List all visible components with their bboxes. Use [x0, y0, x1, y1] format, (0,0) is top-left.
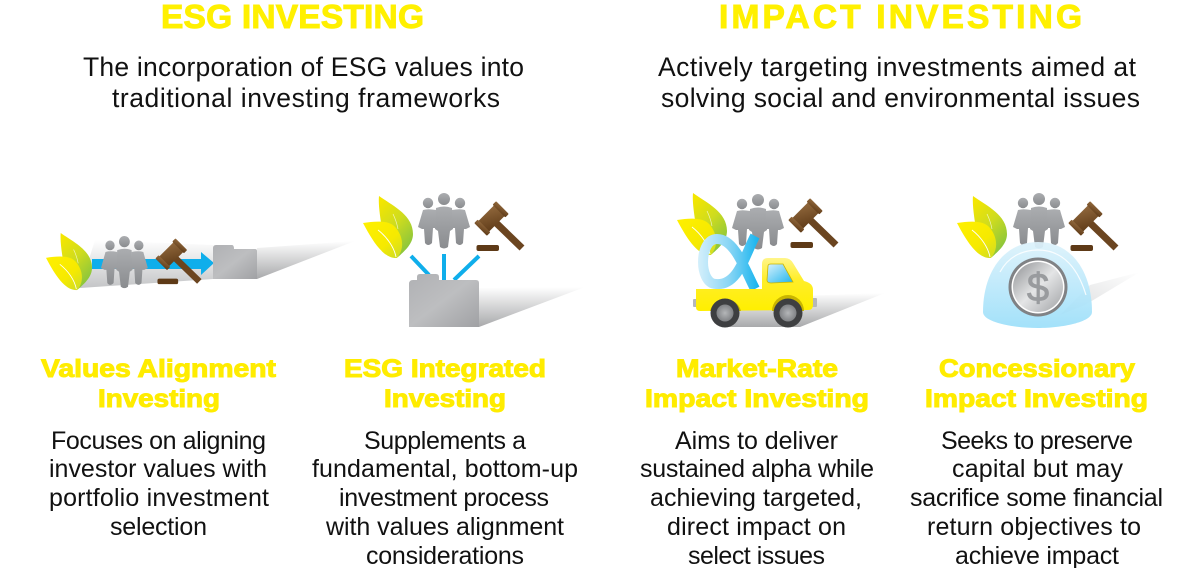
heading: market-rate impact investing	[645, 355, 869, 413]
text: concessionary description: Seeks to preserve	[941, 427, 1133, 455]
heading: concessionary impact investing: Impact Investing	[925, 385, 1148, 413]
panel: ESG integrated investing	[312, 193, 585, 568]
text: values alignment description: portfolio investment	[49, 484, 269, 512]
text: ESG integrated description: Supplements a	[364, 427, 526, 455]
heading: market-rate impact investing: Market-Rate	[676, 355, 838, 383]
text: ESG integrated description: investment process	[339, 484, 549, 512]
panel: ESG investing header	[83, 0, 524, 113]
text: market-rate description: direct impact on	[667, 513, 846, 541]
heading: values alignment investing: Values Alignment	[41, 355, 277, 383]
text: market-rate description: Aims to deliver	[675, 427, 838, 455]
heading: ESG integrated investing: Investing	[384, 385, 506, 413]
text: ESG integrated description	[312, 427, 578, 568]
icon: coin under glass dome: $	[1027, 266, 1049, 310]
text: market-rate description: sustained alpha while	[640, 455, 874, 483]
icon: values alignment arrow into folder	[46, 233, 355, 290]
text: ESG integrated description: fundamental, bottom-up	[312, 455, 578, 483]
text: concessionary description: return objectives to	[927, 513, 1141, 541]
heading: ESG integrated investing: ESG Integrated	[344, 355, 546, 383]
text: values alignment description	[49, 427, 269, 541]
text: values alignment description: investor values with	[49, 455, 267, 483]
text: ESG integrated description: with values alignment	[325, 513, 564, 541]
description: ESG investing: traditional investing frameworks	[112, 83, 500, 113]
icon: inputs flowing into folder	[363, 193, 585, 327]
icon: coin under glass dome	[957, 193, 1140, 328]
text: concessionary description: sacrifice some financial	[910, 484, 1163, 512]
heading: market-rate impact investing: Impact Investing	[645, 385, 869, 413]
panel: values alignment investing	[41, 233, 355, 541]
description: ESG investing	[83, 52, 524, 113]
title: impact investing: IMPACT INVESTING	[719, 0, 1082, 36]
text: concessionary description	[910, 427, 1163, 568]
heading: values alignment investing	[41, 355, 277, 413]
icon: truck carrying alpha	[677, 193, 885, 328]
text: values alignment description: Focuses on aligning	[51, 427, 266, 455]
heading: ESG integrated investing	[344, 355, 546, 413]
text: market-rate description	[640, 427, 874, 568]
panel: market-rate impact investing	[640, 193, 885, 568]
description: impact investing: Actively targeting investments aimed at	[658, 52, 1137, 82]
text: values alignment description: selection	[110, 513, 207, 541]
text: concessionary description: capital but may	[952, 455, 1124, 483]
description: impact investing: solving social and environmental issues	[661, 83, 1140, 113]
description: ESG investing: The incorporation of ESG values into	[83, 52, 524, 82]
description: impact investing	[658, 52, 1140, 113]
panel: impact investing header	[658, 0, 1140, 113]
heading: concessionary impact investing	[925, 355, 1148, 413]
panel: concessionary impact investing	[910, 193, 1163, 568]
heading: concessionary impact investing: Concessionary	[939, 355, 1135, 383]
text: market-rate description: achieving targeted,	[650, 484, 862, 512]
heading: values alignment investing: Investing	[98, 385, 220, 413]
title: ESG investing: ESG INVESTING	[161, 0, 424, 36]
